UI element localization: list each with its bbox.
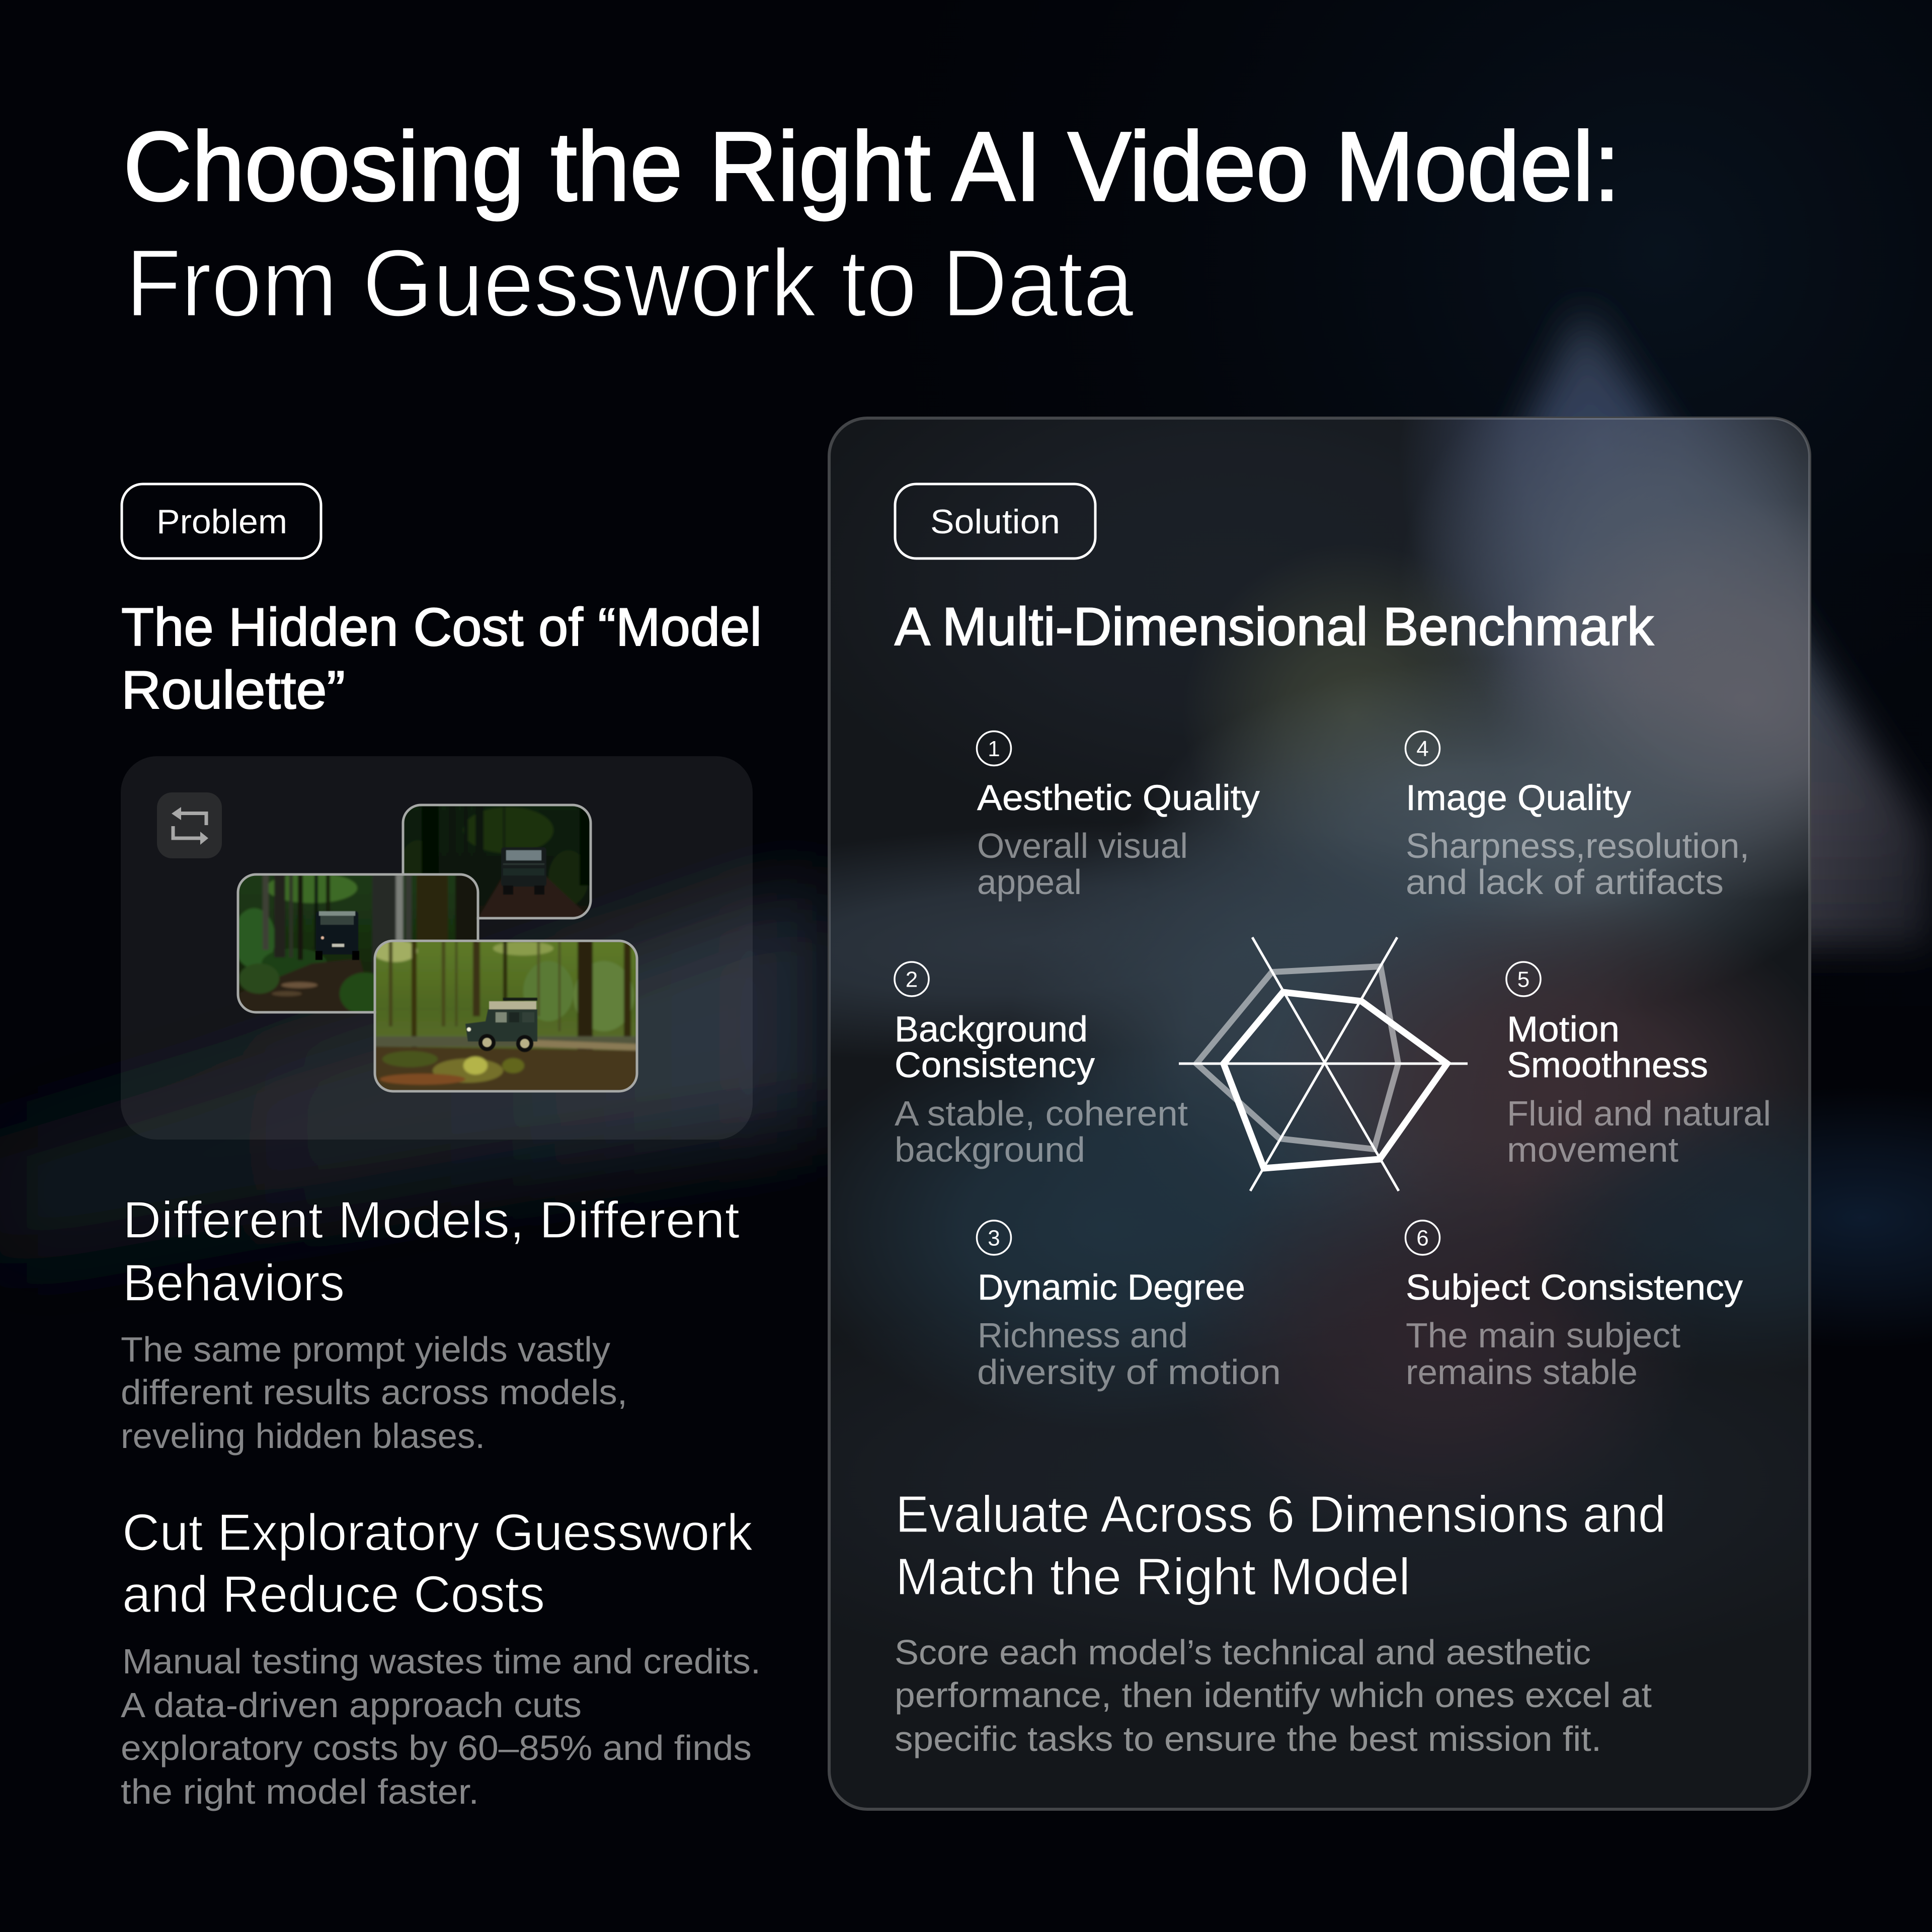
text block: evaluate across dimensions: specific tasks to ensure the best mission fit.: [895, 1719, 1601, 1758]
text block: different models: [121, 1191, 740, 1456]
dimension 2: background consistency: background: [895, 1130, 1085, 1169]
text block: cut guesswork: Cut Exploratory Guesswork: [122, 1503, 753, 1561]
text block: evaluate across dimensions: Match the Right Model: [896, 1548, 1410, 1605]
dimension 1: aesthetic quality: appeal: [977, 862, 1082, 902]
text block: evaluate across dimensions: Evaluate Across 6 Dimensions and: [896, 1485, 1666, 1543]
text block: cut guesswork: A data-driven approach cuts: [121, 1685, 582, 1725]
text block: evaluate across dimensions: [895, 1485, 1666, 1758]
photo: forest trail: [233, 873, 478, 1015]
text block: cut guesswork: exploratory costs by 60–85% and finds: [121, 1728, 752, 1767]
title: From Guesswork to Data: [126, 230, 1134, 337]
badge: Problem: [122, 484, 321, 558]
title: [123, 112, 1620, 337]
dimension 3: dynamic degree: 3: [988, 1226, 1000, 1251]
dimension 1: aesthetic quality: 1: [988, 737, 1000, 761]
dimension 2: background consistency: Consistency: [895, 1045, 1095, 1085]
heading: hidden cost: The Hidden Cost of “Model: [121, 597, 762, 657]
text block: different models: The same prompt yields vastly: [121, 1330, 610, 1369]
badge: Problem: Problem: [156, 503, 287, 541]
text block: different models: Behaviors: [123, 1254, 345, 1312]
title: Choosing the Right AI Video Model:: [123, 112, 1620, 221]
dimension 3: dynamic degree: diversity of motion: [977, 1352, 1281, 1392]
panel: problem: [121, 484, 762, 1811]
dimension 3: dynamic degree: Richness and: [978, 1316, 1188, 1355]
dimension 5: motion smoothness: 5: [1517, 967, 1530, 992]
heading: benchmark: A Multi-Dimensional Benchmark: [895, 596, 1654, 657]
text block: different models: Different Models, Different: [123, 1191, 740, 1249]
dimension 6: subject consistency: The main subject: [1406, 1316, 1680, 1355]
image card: model roulette: [121, 756, 753, 1140]
dimension 1: aesthetic quality: [977, 732, 1260, 902]
dimension 4: image quality: Sharpness,resolution,: [1406, 826, 1749, 865]
dimension 5: motion smoothness: Motion: [1507, 1010, 1620, 1050]
panel: solution: [523, 131, 1932, 1811]
glass panel surface: [523, 131, 1932, 1811]
dimension 3: dynamic degree: Dynamic Degree: [978, 1268, 1245, 1308]
text block: evaluate across dimensions: performance, then identify which ones excel at: [895, 1675, 1652, 1715]
dimension 6: subject consistency: 6: [1416, 1226, 1429, 1251]
dimension 3: dynamic degree: [977, 1221, 1281, 1392]
photo: jeep in sunlit forest: [372, 940, 637, 1091]
dimension 5: motion smoothness: [1506, 962, 1771, 1169]
dimension 6: subject consistency: Subject Consistency: [1406, 1268, 1743, 1308]
text block: cut guesswork: Manual testing wastes time and credits.: [122, 1642, 761, 1681]
heading: hidden cost: Roulette”: [121, 660, 345, 720]
dimension 4: image quality: [1406, 732, 1749, 902]
dimension 1: aesthetic quality: Overall visual: [977, 826, 1188, 865]
text block: different models: different results across models,: [121, 1373, 627, 1412]
dimension 2: background consistency: Background: [895, 1010, 1088, 1050]
photo: dark forest road: [397, 805, 591, 918]
text block: cut guesswork: [121, 1503, 761, 1811]
text block: cut guesswork: and Reduce Costs: [122, 1565, 545, 1623]
heading: hidden cost: [121, 597, 762, 720]
dimension 5: motion smoothness: Smoothness: [1507, 1045, 1708, 1085]
badge: Solution: [895, 484, 1095, 558]
dimension 4: image quality: Image Quality: [1406, 778, 1632, 818]
dimension 6: subject consistency: [1406, 1221, 1743, 1392]
dimension 6: subject consistency: remains stable: [1406, 1352, 1638, 1392]
dimension 2: background consistency: [895, 962, 1188, 1169]
radar chart: [1179, 937, 1468, 1191]
dimension 5: motion smoothness: movement: [1507, 1130, 1678, 1169]
dimension 1: aesthetic quality: Aesthetic Quality: [977, 778, 1260, 818]
badge: Solution: Solution: [930, 503, 1060, 541]
dimension 4: image quality: and lack of artifacts: [1406, 862, 1724, 902]
dimension 2: background consistency: A stable, coherent: [895, 1094, 1188, 1133]
dimension 4: image quality: 4: [1416, 737, 1429, 761]
text block: evaluate across dimensions: Score each model’s technical and aesthetic: [895, 1633, 1591, 1672]
text block: cut guesswork: the right model faster.: [121, 1772, 479, 1811]
icon: swap arrows: [157, 792, 222, 858]
text block: different models: reveling hidden blases.: [121, 1416, 485, 1456]
dimension 5: motion smoothness: Fluid and natural: [1507, 1094, 1771, 1133]
dimension 2: background consistency: 2: [906, 967, 918, 992]
